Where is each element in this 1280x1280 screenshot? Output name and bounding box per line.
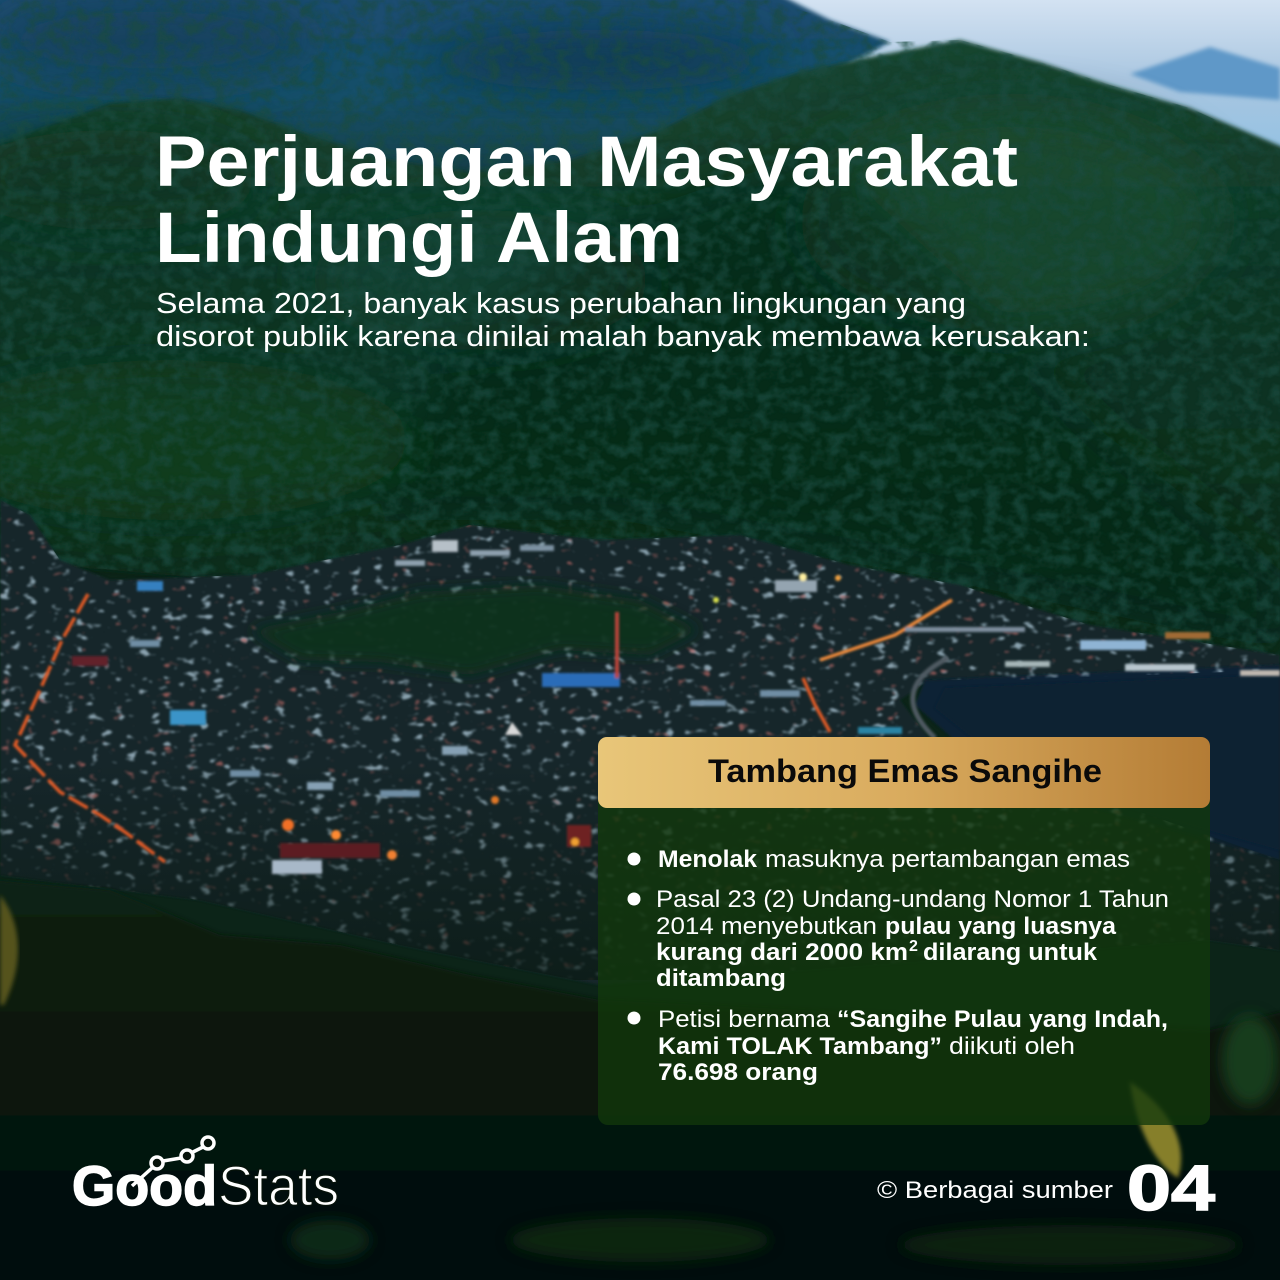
title: Lindungi Alam <box>155 199 683 278</box>
logo chart icon <box>132 1137 214 1186</box>
subtitle: disorot publik karena dinilai malah banyak membawa kerusakan: <box>156 321 1090 353</box>
subtitle: Selama 2021, banyak kasus perubahan lingkungan yang <box>156 288 966 320</box>
forest texture <box>0 0 1280 670</box>
bullet: Petisi: 76.698 orang <box>658 1059 818 1086</box>
page number: 04 <box>1127 1152 1216 1224</box>
back blue mountains <box>0 0 890 200</box>
bullet: Pasal 23: pulau yang luasnya <box>885 913 1117 940</box>
panel header: Tambang Emas Sangihe <box>708 753 1102 789</box>
bullet: Petisi: Petisi bernama <box>658 1006 831 1033</box>
bullet: Pasal 23: ditambang <box>656 965 786 992</box>
water bay <box>915 665 1280 860</box>
foreground foliage <box>290 1015 1278 1265</box>
panel: Tambang Emas Sangihe <box>598 737 1210 1125</box>
title <box>155 123 1018 278</box>
bullet: Menolak: masuknya pertambangan emas <box>765 846 1130 873</box>
logo: GoodStats <box>72 1137 339 1217</box>
logo: GoodStats: Stats <box>218 1154 339 1217</box>
town ground <box>0 500 1280 985</box>
mountain light and shade <box>0 110 1280 650</box>
town lights, roads and roofs <box>15 540 1280 874</box>
foreground plant right <box>1130 1082 1181 1178</box>
bullet: Menolak: Menolak <box>658 846 758 873</box>
sky <box>700 0 1280 180</box>
bullet: Menolak <box>628 846 1130 873</box>
bullet: Pasal 23: kurang dari 2000 km <box>656 939 908 966</box>
central dark forest patch <box>250 585 700 675</box>
bullet: Pasal 23: 2 <box>909 938 918 955</box>
front green mountains <box>0 40 1280 670</box>
bullet: Petisi <box>628 1006 1168 1086</box>
panel header <box>598 737 1210 808</box>
water overlay <box>935 675 1280 850</box>
town speckled houses <box>0 500 1280 980</box>
bullet: Pasal 23: dilarang untuk <box>923 939 1098 966</box>
bullet: Pasal 23: Pasal 23 (2) Undang-undang Nomor 1 Tahun <box>656 886 1169 913</box>
bullet: Petisi: “Sangihe Pulau yang Indah, <box>837 1006 1168 1033</box>
back mountain dark ridges <box>0 0 780 90</box>
logo: GoodStats: Good <box>72 1154 217 1217</box>
bullet: Petisi: Kami TOLAK Tambang” <box>658 1033 942 1060</box>
source credit: © Berbagai sumber <box>877 1177 1113 1204</box>
lower forest foreground <box>0 880 1280 1280</box>
foreground leaf left <box>0 895 18 1005</box>
title: Perjuangan Masyarakat <box>155 123 1018 202</box>
panel body <box>598 800 1210 1125</box>
bullet: Pasal 23 <box>628 886 1169 992</box>
distant island <box>1130 47 1280 100</box>
bullet: Petisi: diikuti oleh <box>949 1033 1075 1060</box>
bullet: Pasal 23: 2014 menyebutkan <box>656 913 877 940</box>
subtitle <box>156 288 1090 353</box>
town southern fade <box>0 760 1280 980</box>
